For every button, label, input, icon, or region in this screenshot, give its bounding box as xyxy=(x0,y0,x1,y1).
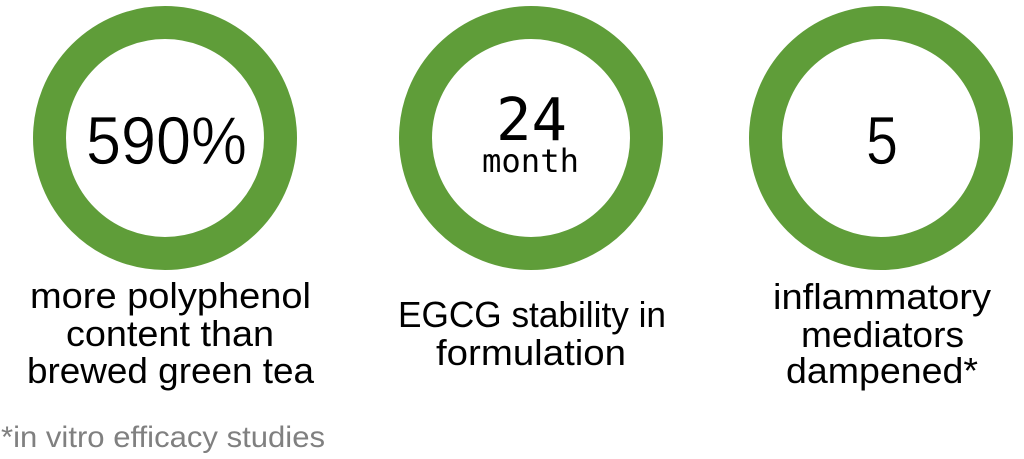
stat: inflammatory mediators xyxy=(766,22,996,391)
ring 3 xyxy=(766,22,996,254)
value: 590%: 590% xyxy=(86,103,247,179)
caption: EGCG: EGCG stability in xyxy=(398,294,666,335)
value: 5: 5 xyxy=(866,103,898,179)
ring 2 xyxy=(416,22,646,254)
stat: polyphenol content xyxy=(27,22,315,391)
caption: inflammatory: mediators xyxy=(801,314,964,355)
caption: polyphenol: more polyphenol xyxy=(30,275,311,316)
stat: EGCG stability xyxy=(398,22,666,373)
caption: inflammatory: inflammatory xyxy=(773,276,991,317)
unit: month: month xyxy=(482,142,579,180)
caption: inflammatory: dampened* xyxy=(786,350,978,391)
caption: inflammatory xyxy=(773,276,991,391)
footnote: *in vitro efficacy studies xyxy=(1,421,325,454)
caption: EGCG xyxy=(398,294,666,373)
caption: polyphenol: brewed green tea xyxy=(27,350,315,391)
caption: polyphenol xyxy=(27,275,315,391)
ring 1 xyxy=(50,22,280,254)
caption: polyphenol: content than xyxy=(66,313,274,354)
caption: EGCG: formulation xyxy=(436,332,626,373)
value: 24: 24 xyxy=(496,85,567,154)
